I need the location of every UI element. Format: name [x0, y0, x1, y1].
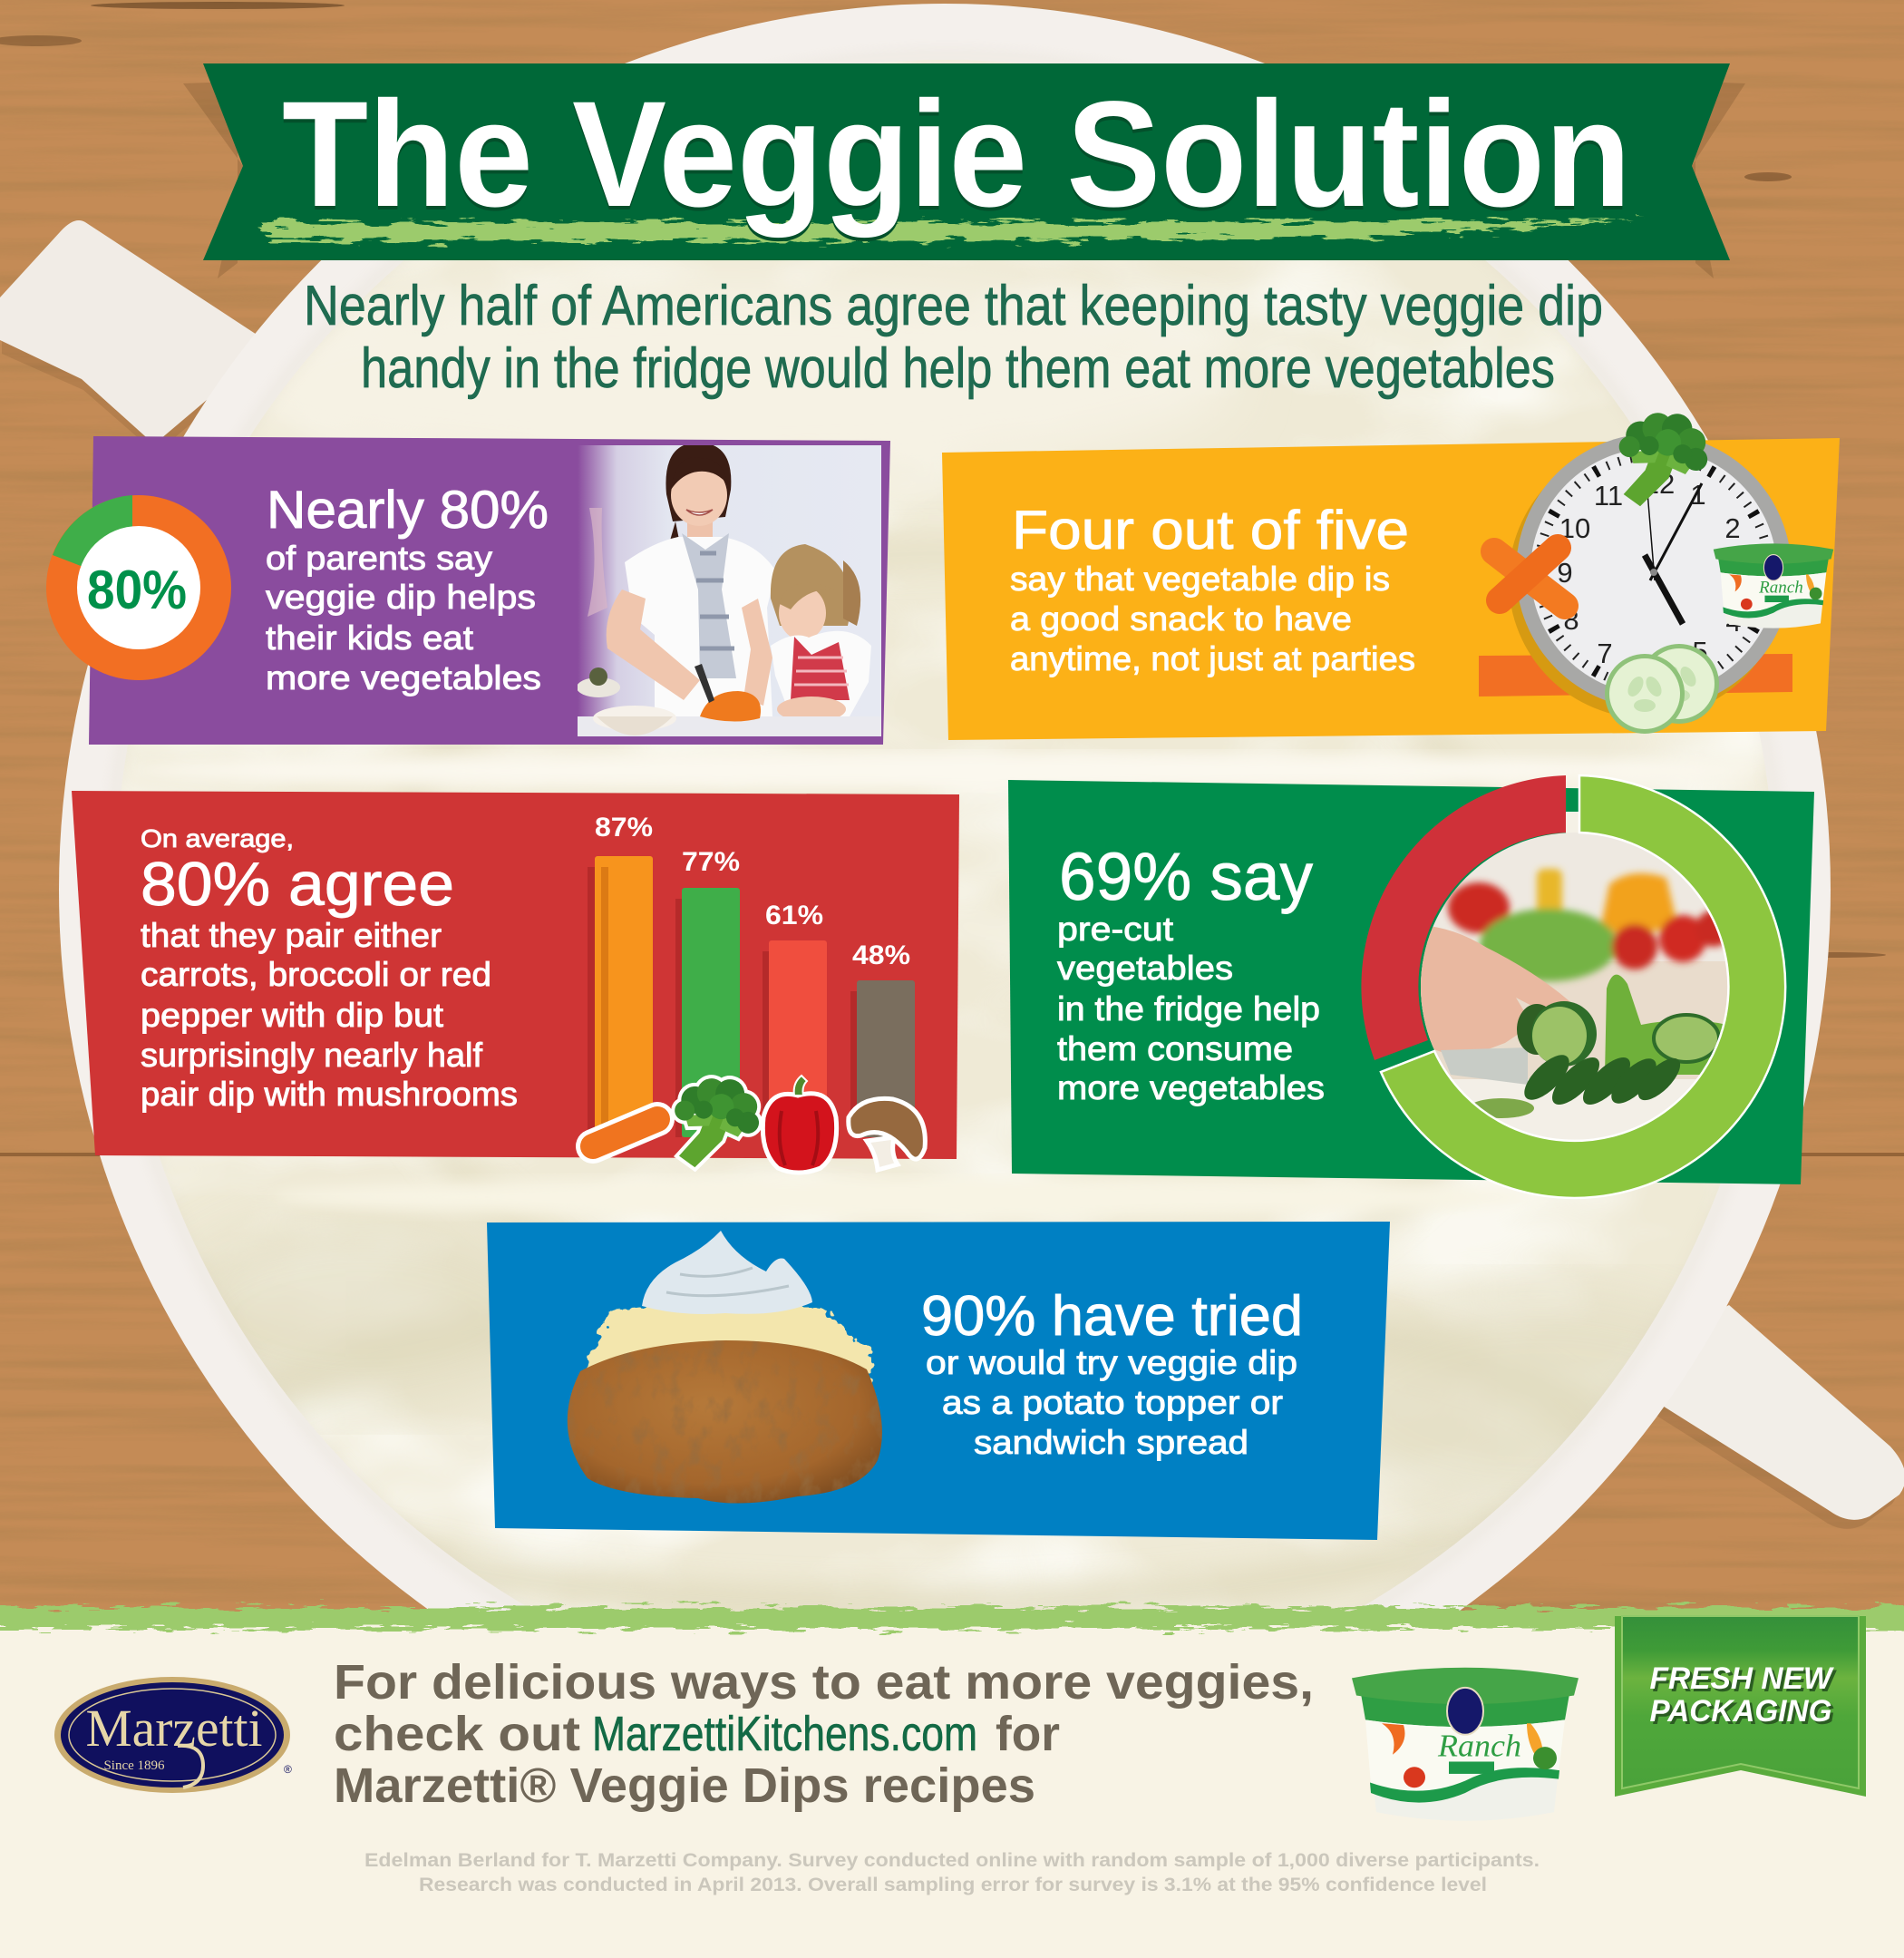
agree text: that they pair either — [141, 917, 442, 954]
potato text — [921, 1285, 1303, 1461]
brush stroke under title — [258, 220, 1641, 241]
parents stat text: more vegetables — [266, 659, 541, 697]
donut chart: 69% — [1361, 775, 1785, 1198]
69% text: 69% say — [1059, 839, 1313, 914]
four out of five text: anytime, not just at parties — [1010, 640, 1415, 677]
icon: broccoli — [662, 1067, 768, 1180]
title: The Veggie Solution — [282, 71, 1631, 239]
call to action text — [334, 1655, 1314, 1813]
four out of five text: say that vegetable dip is — [1010, 560, 1390, 598]
ribbon: fresh new packaging: FRESH NEW — [1652, 1664, 1837, 1699]
source note — [364, 1850, 1540, 1895]
title: The Veggie Solution — [282, 74, 1631, 242]
orange band behind clock — [1479, 654, 1792, 697]
source note: Edelman Berland for T. Marzetti Company. Survey conducted online with random sample of 1,000 diverse participants. — [364, 1850, 1540, 1871]
icon: mushroom — [849, 1098, 925, 1170]
agree text: surprisingly nearly half — [141, 1037, 483, 1074]
69% text: pre-cut — [1057, 911, 1174, 948]
icon: broccoli on clock — [1606, 402, 1716, 520]
parents stat text: Nearly 80% — [267, 481, 549, 540]
bar: mushrooms 48% — [850, 940, 915, 1137]
icon: clock: 12 — [1644, 468, 1675, 500]
bar: carrots 87% — [588, 813, 653, 1139]
icon: clock: 2 — [1724, 512, 1741, 544]
icon: clock: 1 — [1690, 479, 1706, 511]
panel: four out of five — [942, 402, 1840, 740]
potato text: sandwich spread — [974, 1424, 1248, 1461]
icon: red pepper — [763, 1076, 837, 1173]
ribbon: fresh new packaging: PACKAGING — [1650, 1694, 1831, 1729]
handle: bottom right — [1598, 1305, 1904, 1529]
bar: red pepper 61% — [763, 901, 827, 1137]
icon: clock: 5 — [1692, 636, 1708, 667]
call to action text: MarzettiKitchens.com — [592, 1707, 977, 1761]
ribbon: fresh new packaging: PACKAGING — [1652, 1697, 1835, 1731]
subtitle — [304, 275, 1603, 400]
icon: clock: 4 — [1725, 606, 1742, 638]
ring segment: 69% green — [1381, 775, 1785, 1198]
icon: clock: 10 — [1559, 512, 1590, 544]
donut chart: 80%: 80% — [87, 560, 187, 620]
banner ribbon — [203, 63, 1730, 260]
title banner — [183, 63, 1745, 278]
agree text: pair dip with mushrooms — [141, 1076, 518, 1113]
panel: parents stat — [46, 436, 890, 745]
icon: dip tub — [1714, 543, 1833, 628]
subtitle: handy in the fridge would help them eat more vegetables — [361, 337, 1555, 400]
panel: 90% have tried — [487, 1222, 1390, 1540]
banner shadow tails — [183, 82, 1745, 278]
parents stat text — [266, 481, 549, 697]
ring segment: remainder red — [1361, 775, 1566, 1060]
logo: Marzetti — [54, 1677, 292, 1793]
potato text: 90% have tried — [921, 1285, 1303, 1348]
icon: baked potato with dip — [568, 1231, 882, 1504]
handle: top left — [0, 220, 274, 453]
call to action text: For delicious ways to eat more veggies, — [334, 1655, 1314, 1710]
logo: Marzetti: Marzetti — [85, 1699, 263, 1758]
torn green edge — [0, 1607, 1904, 1629]
potato text: as a potato topper or — [942, 1384, 1283, 1421]
four out of five text: a good snack to have — [1010, 600, 1352, 638]
69% text: them consume — [1057, 1030, 1293, 1067]
call to action text: for — [996, 1707, 1060, 1761]
icon: clock: 11 — [1594, 480, 1623, 511]
icon: clock — [1509, 433, 1792, 718]
photo: mother and daughter cooking — [577, 443, 881, 736]
call to action text: check out — [334, 1707, 580, 1761]
bar: red pepper 61%: 61% — [765, 901, 823, 930]
icon: crossed carrots — [1494, 548, 1565, 606]
panel: 69% say — [1008, 775, 1814, 1198]
icon: clock: 7 — [1597, 638, 1613, 669]
ribbon: fresh new packaging — [1615, 1616, 1866, 1797]
69% text: in the fridge help — [1057, 990, 1320, 1028]
agree text: pepper with dip but — [141, 997, 444, 1034]
bar: broccoli 77% — [675, 847, 740, 1137]
white gap behind ring — [1566, 812, 1579, 839]
bar chart — [588, 813, 915, 1139]
bowl shadow edge — [111, 55, 1779, 1724]
call to action text: Marzetti® Veggie Dips recipes — [334, 1758, 1035, 1813]
dip surface — [123, 60, 1768, 1612]
69% text — [1057, 839, 1325, 1106]
potato text: or would try veggie dip — [926, 1344, 1297, 1381]
agree text: 80% agree — [141, 850, 454, 919]
footer — [0, 1607, 1904, 1958]
bar: mushrooms 48%: 48% — [852, 940, 910, 970]
agree text: On average, — [141, 824, 294, 852]
parents stat text: of parents say — [266, 540, 493, 577]
bar: carrots 87%: 87% — [595, 813, 653, 843]
panel: 80% agree with bar chart — [72, 791, 959, 1180]
source note: Research was conducted in April 2013. Overall sampling error for survey is 3.1% at the 95% confidence level — [419, 1875, 1487, 1895]
photo: slicing cucumber — [1421, 833, 1728, 1140]
donut chart: 80% — [46, 495, 231, 680]
icon: clock: 8 — [1563, 604, 1579, 636]
parents stat text: veggie dip helps — [266, 579, 536, 616]
agree text — [141, 824, 518, 1113]
logo: Marzetti: ® — [284, 1763, 292, 1776]
four out of five text: Four out of five — [1012, 500, 1409, 560]
icon: cucumber slices — [1605, 644, 1719, 734]
69% text: vegetables — [1057, 950, 1233, 987]
four out of five text — [1010, 500, 1415, 677]
icon: carrot — [593, 1119, 657, 1146]
agree text: carrots, broccoli or red — [141, 956, 491, 993]
icon: clock: 9 — [1557, 557, 1573, 589]
bar: broccoli 77%: 77% — [682, 847, 740, 877]
parents stat text: their kids eat — [266, 619, 474, 657]
footer background — [0, 1619, 1904, 1958]
subtitle: Nearly half of Americans agree that keeping tasty veggie dip — [304, 275, 1603, 337]
icon: product tub — [1352, 1668, 1579, 1821]
ribbon: fresh new packaging: FRESH NEW — [1650, 1661, 1834, 1696]
logo: Marzetti: Since 1896 — [103, 1758, 165, 1773]
69% text: more vegetables — [1057, 1069, 1325, 1106]
